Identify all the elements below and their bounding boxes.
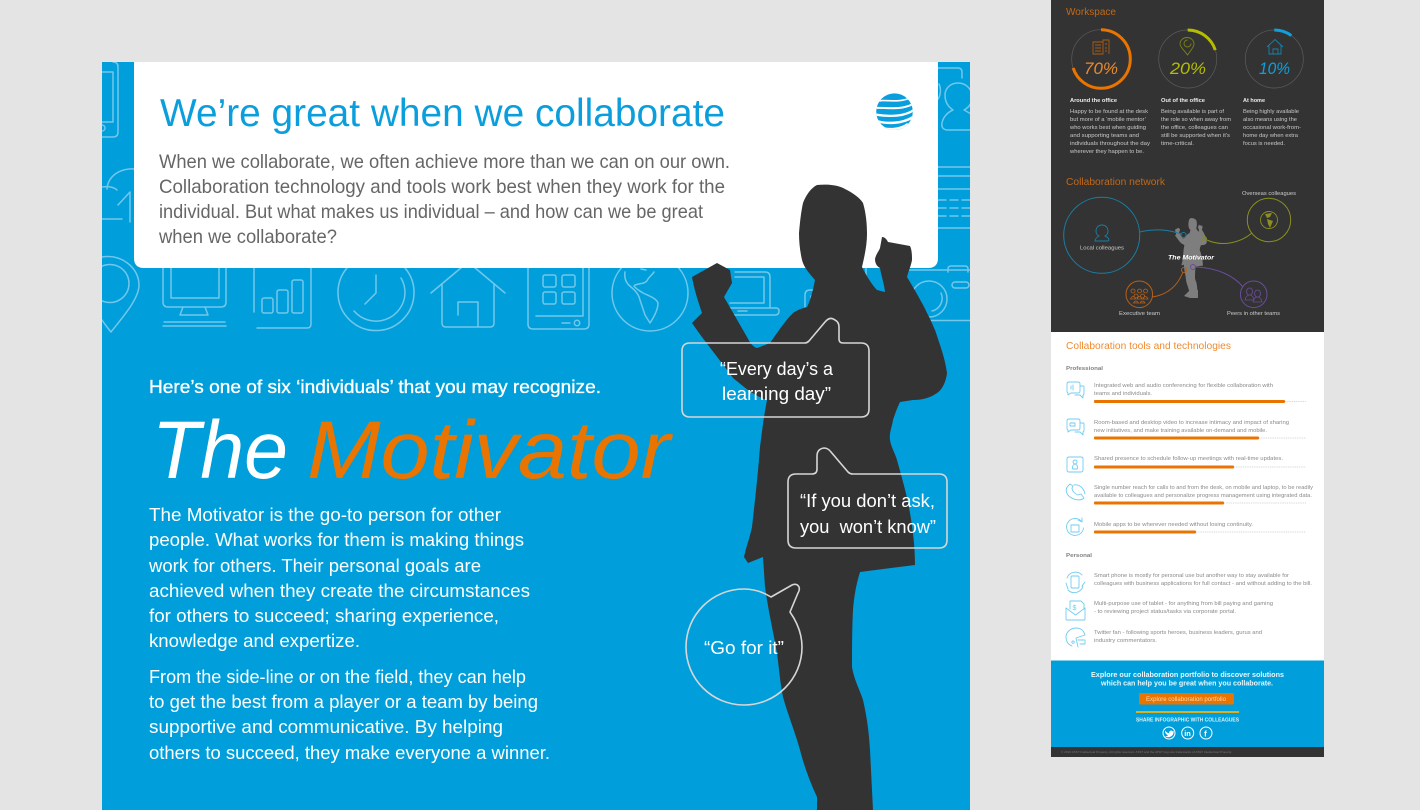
- node: overseas colleagues: Overseas colleagues: [1242, 191, 1296, 197]
- connector: local colleagues: [1140, 230, 1181, 234]
- icon: twitter: [1163, 727, 1175, 739]
- heading: collaboration network: Collaboration network: [1066, 177, 1166, 188]
- intro text block: When we collaborate, we often achieve more than we can on our own.: [159, 151, 730, 173]
- speech bubble: if you don't ask: [788, 448, 947, 548]
- tool row: tablet: Multi-purpose use of tablet - for anything from bill paying and gaming: [1094, 601, 1273, 607]
- text: around the office: Around the office: [1070, 98, 1117, 104]
- silhouette: The Motivator figure: [692, 185, 947, 810]
- icon: chart document: [254, 268, 311, 328]
- panel: call to action (blue): [1051, 660, 1324, 748]
- node: executive team: [1119, 281, 1160, 317]
- icon: facebook: f: [1204, 728, 1207, 738]
- tool row: single number reach: available to colleagues and personalize progress management using integrated data.: [1094, 493, 1312, 499]
- connector: executive team: [1152, 272, 1183, 297]
- speech bubble: go for it: [686, 584, 802, 705]
- tool row: twitter fan: [1066, 628, 1262, 647]
- call to action text: which can help you be great when you collaborate.: [1100, 678, 1273, 688]
- tool row: smart phone: Smart phone is mostly for personal use but another way to stay available for: [1094, 573, 1289, 579]
- text: at home: At home: [1243, 98, 1265, 104]
- panel: main blue poster: [102, 62, 970, 810]
- body text: paragraph two: to get the best from a player or a team by being: [149, 691, 538, 712]
- panel: workspace and network (dark): [1051, 0, 1324, 332]
- text: out of the office: [1161, 98, 1232, 147]
- text: at home: also means using the: [1243, 117, 1297, 123]
- body text: paragraph one: achieved when they create the circumstances: [149, 580, 530, 601]
- icon: mobile app cycle: [1067, 518, 1084, 535]
- icon: tablet: [528, 268, 589, 329]
- label: The Motivator: The Motivator: [1168, 254, 1214, 262]
- intro text block: when we collaborate?: [158, 226, 337, 248]
- body text: paragraph one: people. What works for them is making things: [149, 529, 524, 550]
- body text: paragraph one: work for others. Their personal goals are: [148, 555, 481, 576]
- call to action text: [1091, 670, 1284, 688]
- ring chart: 70% around the office: [1072, 30, 1130, 88]
- text: out of the office: the role so when away from: [1161, 117, 1232, 123]
- text: around the office: but more of a ‘mobile mentor’: [1070, 117, 1146, 123]
- speech bubble: if you don't ask: you won’t know”: [800, 516, 936, 537]
- icon: globe: [611, 268, 689, 332]
- button: explore collaboration portfolio: [1139, 693, 1234, 704]
- text: around the office: [1069, 98, 1150, 155]
- intro text block: individual. But what makes us individual – and how can we be great: [159, 201, 704, 223]
- icon: camera: [905, 266, 970, 320]
- icon: chat video: [1067, 419, 1084, 435]
- button: explore collaboration portfolio: Explore collaboration portfolio: [1146, 697, 1227, 703]
- diagram: collaboration network: [1064, 191, 1296, 317]
- intro text block: [158, 151, 730, 248]
- subheading: personal: Personal: [1066, 553, 1092, 559]
- icon: office building: [1093, 40, 1109, 54]
- ring chart: 20% out of the office: 20%: [1169, 59, 1206, 78]
- icon: clock: [338, 268, 414, 331]
- text: out of the office: the office, colleagues can: [1161, 125, 1228, 131]
- icon: house: [1267, 40, 1283, 54]
- tool row: room-based and desktop video: [1067, 419, 1306, 440]
- tool row: web and audio conferencing: Integrated web and audio conferencing for flexible collaboration with: [1094, 383, 1273, 389]
- body text: paragraph two: supportive and communicative. By helping: [149, 716, 503, 737]
- tool row: tablet: [1066, 601, 1273, 620]
- text: out of the office: time-critical.: [1161, 141, 1194, 147]
- panel: footer bar: [1051, 747, 1324, 757]
- divider bar: [1136, 711, 1239, 713]
- icon: envelope bill: [1066, 601, 1085, 620]
- share label: SHARE INFOGRAPHIC WITH COLLEAGUES: [1136, 718, 1240, 724]
- node: local colleagues: [1064, 197, 1140, 273]
- icon: cloud upload: [102, 169, 134, 222]
- icon: location pin: [102, 256, 140, 333]
- legal text: © 2016 AT&T Intellectual Property. All rights reserved. AT&T and the AT&T logo are trademarks of AT&T Intellectual Property.: [1061, 750, 1232, 754]
- body text: paragraph two: others to succeed, they make everyone a winner.: [149, 742, 550, 763]
- body text: paragraph one: for others to succeed; sharing experience,: [149, 605, 499, 626]
- icon: small device: [805, 268, 866, 307]
- body text: paragraph one: knowledge and expertize.: [149, 630, 360, 651]
- icon: handset: [1066, 484, 1085, 500]
- panel: intro white card: [134, 62, 938, 268]
- icon: sports helmet: [1066, 628, 1085, 647]
- node: overseas colleagues: [1242, 191, 1296, 242]
- speech bubble: if you don't ask: “If you don’t ask,: [800, 490, 935, 511]
- lead-in sentence: Here’s one of six ‘individuals’ that you may recognize.: [149, 376, 601, 397]
- icon: linkedin: [1182, 727, 1194, 739]
- heading: tools and technologies: Collaboration tools and technologies: [1066, 341, 1231, 352]
- speech bubble: learning day: “Every day’s a: [720, 358, 834, 379]
- text: around the office: who works best when guiding: [1069, 125, 1146, 131]
- icon: smart phone: [1066, 572, 1085, 593]
- tool row: mobile apps: Mobile apps to be wherever needed without losing continuity.: [1094, 522, 1254, 528]
- panel: tools and technologies (white): [1051, 332, 1324, 661]
- tool row: smart phone: colleagues with business applications for full contact - and without adding to the bill.: [1094, 581, 1312, 587]
- icon: AT&T globe logo: [875, 93, 914, 130]
- tool row: smart phone: [1066, 572, 1312, 593]
- heading: workspace: Workspace: [1066, 7, 1116, 18]
- node: peers in other teams: Peers in other teams: [1227, 311, 1280, 317]
- speech bubble: learning day: [682, 318, 869, 417]
- tool row: twitter fan: Twitter fan - following sports heroes, business leaders, gurus and: [1094, 630, 1262, 636]
- text: around the office: wherever they happen to be.: [1069, 149, 1144, 155]
- ring chart: 10% at home: [1245, 30, 1303, 88]
- icon: keyboard device: [938, 167, 970, 228]
- text: around the office: Happy to be found at the desk: [1070, 109, 1148, 115]
- text: at home: focus is needed.: [1243, 141, 1285, 147]
- icon: address book: [1067, 457, 1083, 472]
- icon: house: [431, 262, 505, 327]
- silhouette: small Motivator: [1175, 218, 1207, 298]
- tool row: shared presence: [1067, 456, 1306, 472]
- connector: overseas colleagues: [1207, 233, 1252, 244]
- call to action text: Explore our collaboration portfolio to discover solutions: [1091, 670, 1284, 679]
- tool row: single number reach: Single number reach for calls to and from the desk, on mobile and laptop, to be readily: [1094, 485, 1313, 491]
- tool row: mobile apps: [1067, 518, 1306, 535]
- icon: phone: [102, 62, 118, 137]
- body text: paragraph one: The Motivator is the go-to person for other: [149, 504, 501, 525]
- persona heading: The: [152, 405, 288, 496]
- icon: desktop monitor: [163, 268, 226, 326]
- icon: facebook: [1200, 727, 1212, 739]
- text: out of the office: Being available is part of: [1161, 109, 1225, 115]
- connector: peers in other teams: [1196, 267, 1243, 287]
- connector nodes: [1181, 232, 1206, 272]
- body text: paragraph two: [149, 666, 550, 763]
- title: We’re great when we collaborate: [160, 92, 725, 135]
- tool row: web and audio conferencing: [1067, 382, 1306, 403]
- node: peers in other teams: [1227, 281, 1280, 317]
- text: around the office: and supporting teams and: [1070, 133, 1139, 139]
- icon: person: [938, 67, 970, 131]
- ring chart: 20% out of the office: [1159, 30, 1217, 88]
- persona heading: [152, 405, 674, 496]
- tool row: single number reach: [1066, 484, 1313, 504]
- tool row: room-based and desktop video: new initiatives, and make training available on-demand and mobile.: [1094, 428, 1267, 434]
- ring chart: 10% at home: 10%: [1259, 59, 1290, 78]
- icon: chat speakers: [1067, 382, 1084, 398]
- tool row: tablet: $: [1072, 605, 1076, 612]
- body text: paragraph one: [148, 504, 530, 651]
- intro text block: Collaboration technology and tools work best when they work for the: [159, 176, 725, 198]
- body text: paragraph two: From the side-line or on the field, they can help: [149, 666, 526, 687]
- tool row: room-based and desktop video: Room-based and desktop video to increase intimacy and impact of sharing: [1094, 420, 1289, 426]
- text: at home: home day when extra: [1243, 133, 1298, 139]
- tool row: shared presence: Shared presence to schedule follow-up meetings with real-time updates.: [1094, 456, 1284, 462]
- tool row: tablet: - to reviewing project status/tasks via corporate portal.: [1094, 609, 1237, 615]
- text: out of the office: still be supported when it’s: [1161, 133, 1230, 139]
- ring chart: 70% around the office: 70%: [1084, 59, 1118, 78]
- node: local colleagues: Local colleagues: [1080, 246, 1124, 252]
- tool row: twitter fan: industry commentators.: [1094, 638, 1158, 644]
- speech bubble: learning day: learning day”: [722, 383, 831, 404]
- tool row: web and audio conferencing: teams and individuals.: [1094, 391, 1153, 397]
- background line icons: [91, 62, 978, 332]
- text: around the office: individuals throughout the day: [1070, 141, 1150, 147]
- text: at home: occasional work-from-: [1243, 125, 1301, 131]
- speech bubble: go for it: “Go for it”: [704, 637, 784, 658]
- icon: location pin: [1180, 38, 1194, 55]
- text: at home: [1243, 98, 1301, 147]
- node: executive team: Executive team: [1119, 311, 1160, 317]
- icon: laptop: [725, 272, 779, 315]
- text: out of the office: Out of the office: [1161, 98, 1205, 104]
- subheading: professional: Professional: [1066, 366, 1103, 372]
- persona heading: Motivator: [307, 405, 674, 496]
- text: at home: Being highly available: [1243, 109, 1299, 115]
- icon: linkedin: in: [1184, 729, 1191, 738]
